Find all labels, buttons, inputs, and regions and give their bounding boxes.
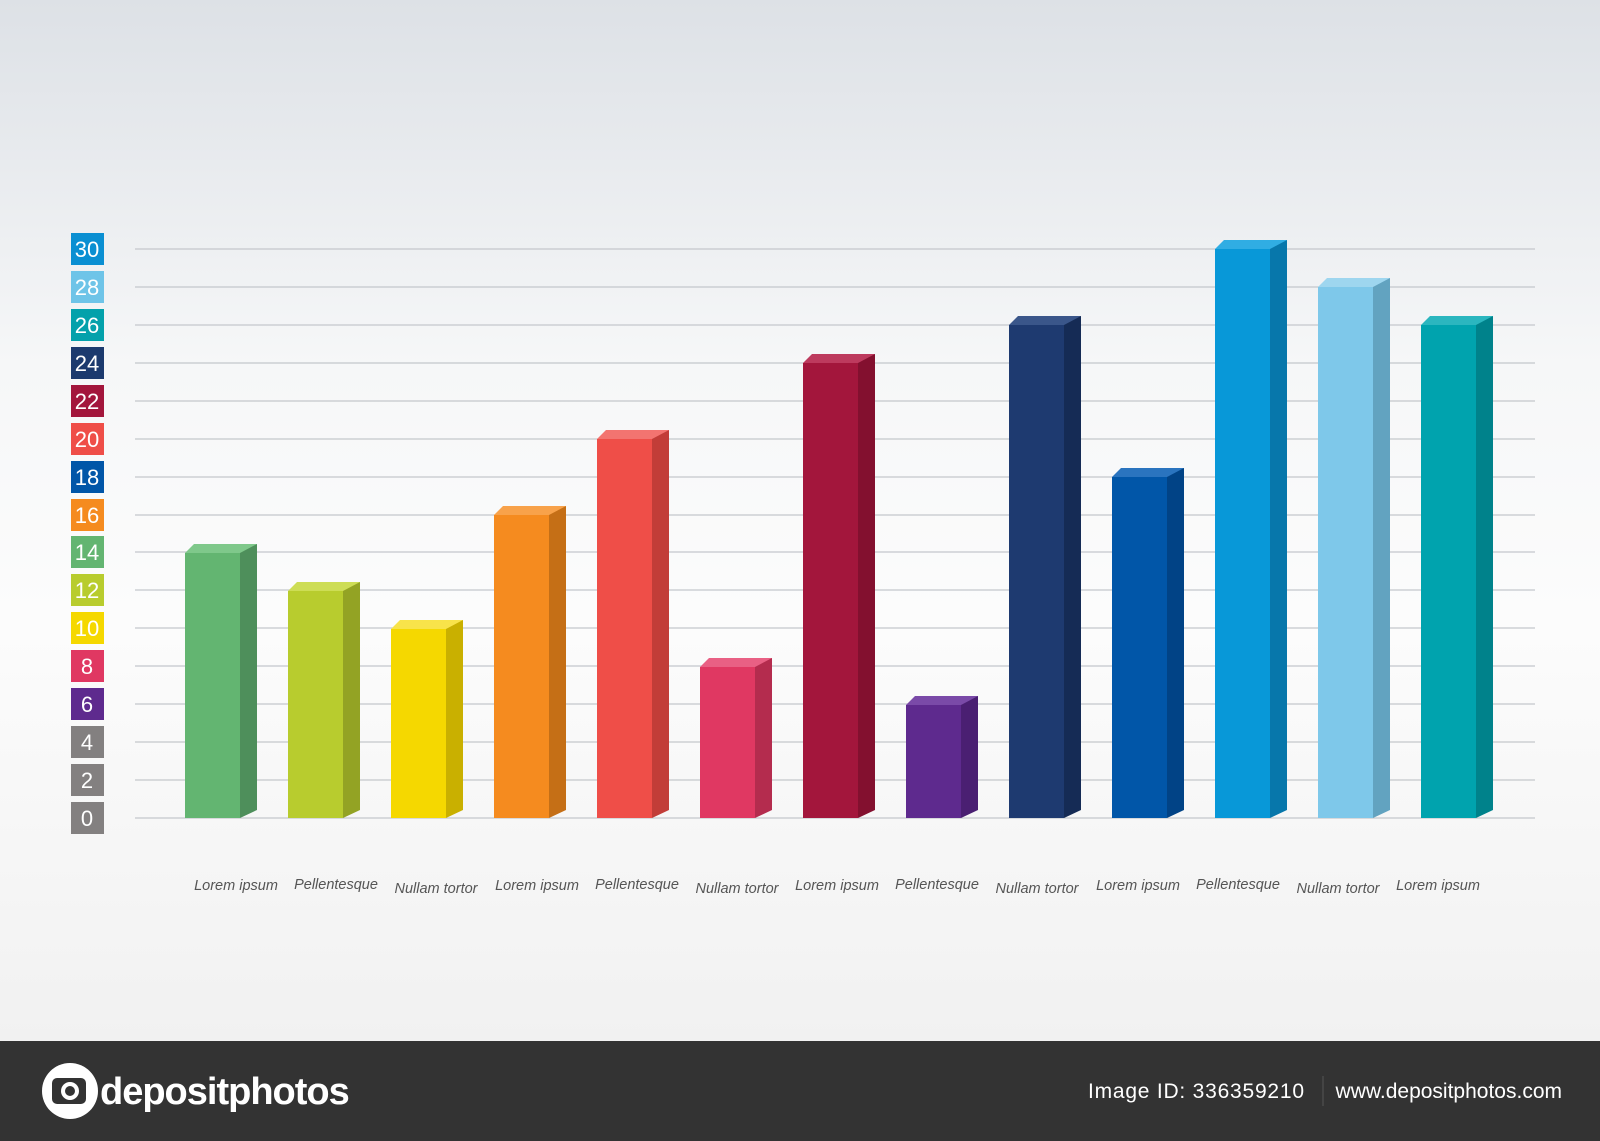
- image id: Image ID: 336359210: [1088, 1080, 1304, 1103]
- category labels: Lorem ipsum: [1096, 878, 1180, 894]
- footer bar: [0, 1041, 1600, 1141]
- gridlines: [135, 249, 1535, 818]
- y-axis labels: 4: [81, 730, 93, 755]
- category labels: Pellentesque: [595, 877, 679, 893]
- category labels: [194, 877, 1480, 897]
- category labels: Nullam tortor: [394, 881, 479, 897]
- y-axis labels: 18: [75, 465, 99, 490]
- y-axis labels: 10: [75, 616, 99, 641]
- category labels: Lorem ipsum: [795, 878, 879, 894]
- category labels: Nullam tortor: [996, 881, 1080, 897]
- category labels: Pellentesque: [895, 877, 979, 893]
- category labels: Nullam tortor: [696, 881, 780, 897]
- y-axis labels: 6: [81, 692, 93, 717]
- url: www.depositphotos.com: [1335, 1080, 1562, 1103]
- y-axis labels: 2: [81, 768, 93, 793]
- category labels: Nullam tortor: [1296, 881, 1381, 897]
- y-axis labels: 12: [75, 578, 99, 603]
- y-axis labels: 0: [81, 806, 93, 831]
- y-axis labels: 14: [75, 540, 99, 565]
- y-axis labels: 30: [75, 237, 99, 262]
- y-axis labels: 22: [75, 389, 99, 414]
- bars: [185, 240, 1493, 818]
- y-axis labels: 8: [81, 654, 93, 679]
- y-axis labels: 20: [75, 427, 99, 452]
- y-axis labels: 24: [75, 351, 99, 376]
- y-axis labels: 16: [75, 503, 99, 528]
- category labels: Lorem ipsum: [194, 878, 278, 894]
- logo text: depositphotos: [100, 1071, 349, 1113]
- category labels: Pellentesque: [294, 877, 378, 893]
- y-axis labels: 26: [75, 313, 99, 338]
- y-axis labels: [71, 233, 104, 834]
- category labels: Lorem ipsum: [495, 878, 579, 894]
- category labels: Lorem ipsum: [1396, 878, 1480, 894]
- category labels: Pellentesque: [1196, 877, 1280, 893]
- icon: camera logo: [42, 1063, 98, 1119]
- y-axis labels: 28: [75, 275, 99, 300]
